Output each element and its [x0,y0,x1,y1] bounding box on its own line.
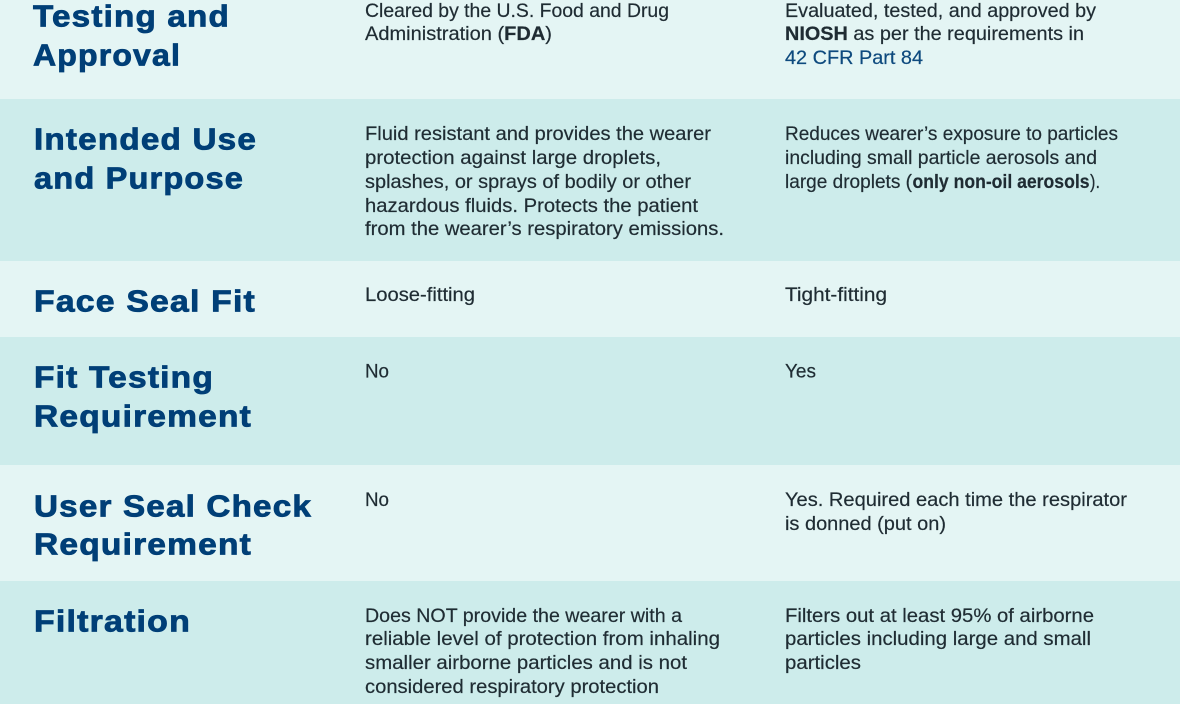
row: intended use and purpose [0,99,1180,261]
respirator: testing and approval [785,0,1096,69]
respirator: face seal fit: Tight-fitting [785,284,887,306]
surgical mask: testing and approval: Administration (FDA) [365,23,552,45]
surgical mask: filtration: smaller airborne particles and is not [365,652,688,674]
surgical mask: intended use: hazardous fluids. Protects the patient [365,195,699,217]
heading: testing and approval [33,0,230,72]
row: filtration [0,581,1180,704]
heading: user seal check requirement: User Seal Check [34,488,312,524]
respirator: filtration: particles [785,652,861,674]
surgical mask: user seal check: No [365,489,389,511]
surgical mask: intended use: from the wearer’s respiratory emissions. [365,218,724,240]
respirator: testing and approval: Evaluated, tested, and approved by [785,0,1096,22]
surgical mask: filtration [365,605,720,698]
respirator: filtration: Filters out at least 95% of airborne [785,605,1094,627]
heading: intended use and purpose: and Purpose [34,160,244,196]
heading: intended use and purpose [34,122,257,196]
respirator: intended use [785,123,1118,193]
heading: fit testing requirement [34,360,252,434]
surgical mask: testing and approval: Cleared by the U.S. Food and Drug [365,0,669,22]
respirator: intended use: ). [1090,171,1100,193]
surgical mask: intended use: protection against large droplets, [365,147,661,169]
respirator: intended use: only non-oil aerosols [912,171,1090,193]
respirator: intended use: Reduces wearer’s exposure to particles [785,123,1118,145]
heading: face seal fit: Face Seal Fit [34,284,256,318]
heading: fit testing requirement: Fit Testing [34,360,214,394]
respirator: fit testing: Yes [785,360,816,382]
respirator: intended use: large droplets ( [785,171,912,193]
surgical mask: filtration: Does NOT provide the wearer with a [365,605,682,627]
respirator: user seal check [785,489,1128,535]
row: fit testing requirement [0,337,1180,465]
surgical mask: intended use [365,123,724,240]
respirator: user seal check: Yes. Required each time the respirator [785,489,1128,511]
respirator: filtration: particles including large and small [785,628,1091,650]
row: face seal fit [0,261,1180,337]
surgical mask: filtration: reliable level of protection from inhaling [365,628,720,650]
respirator: testing and approval: NIOSH as per the requirements in [785,23,1084,45]
surgical mask: testing and approval [365,0,669,45]
respirator: filtration [785,605,1094,674]
heading: user seal check requirement [34,488,312,562]
surgical mask: intended use: splashes, or sprays of bodily or other [365,171,692,193]
respirator: testing and approval: 42 CFR Part 84 [785,47,923,69]
heading: testing and approval: Approval [33,38,181,72]
surgical mask: face seal fit: Loose-fitting [365,284,475,306]
respirator: intended use: including small particle aerosols and [785,147,1097,169]
respirator: user seal check: is donned (put on) [785,513,946,535]
heading: filtration: Filtration [34,604,191,638]
row: testing and approval [0,0,1180,99]
surgical mask: intended use: Fluid resistant and provides the wearer [365,123,712,145]
surgical mask: fit testing: No [365,360,389,382]
heading: intended use and purpose: Intended Use [34,122,257,156]
surgical mask: filtration: considered respiratory protection [365,676,659,698]
row: user seal check requirement [0,465,1180,581]
heading: fit testing requirement: Requirement [34,398,252,434]
heading: user seal check requirement: Requirement [34,526,252,562]
